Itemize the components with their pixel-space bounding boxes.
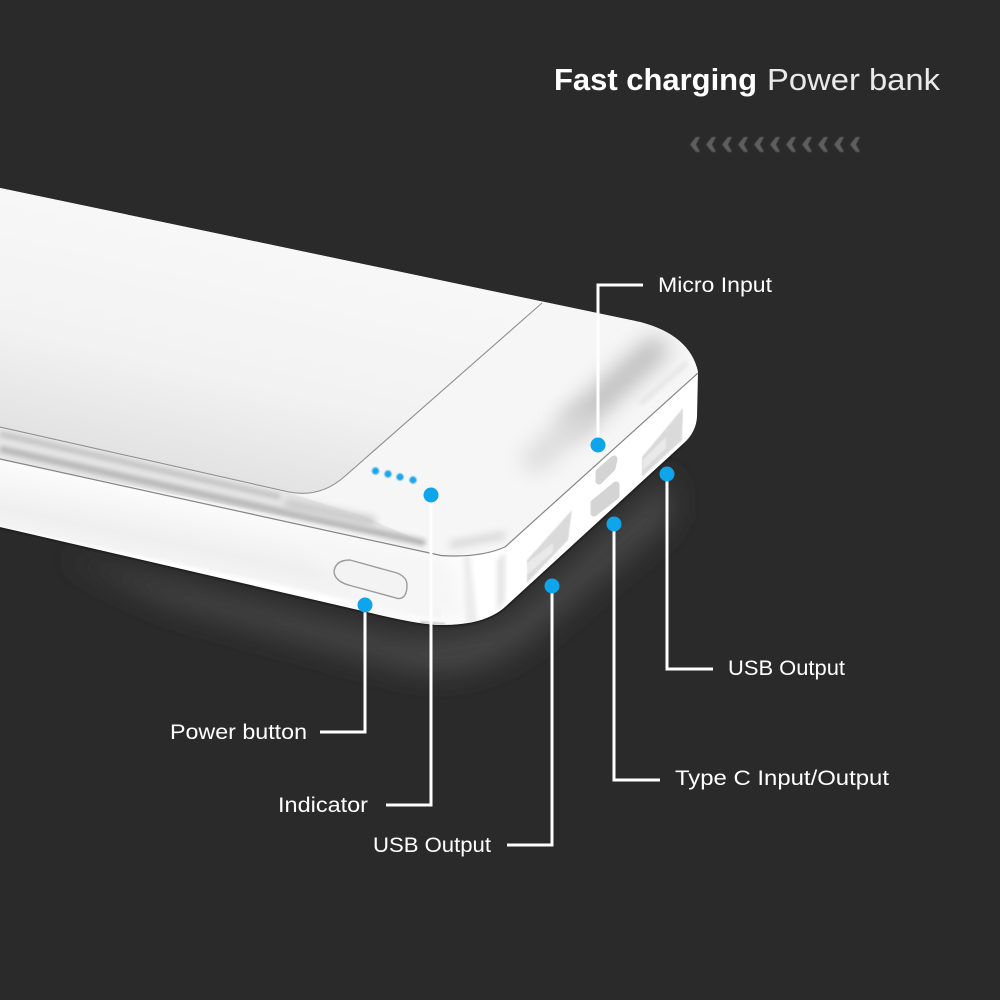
power bank illustration bbox=[0, 188, 698, 628]
callout: Power button: Power button bbox=[170, 721, 307, 744]
title bbox=[554, 62, 941, 97]
title: Fast charging bbox=[554, 62, 757, 97]
power button bbox=[334, 560, 407, 599]
callout: Power button bbox=[170, 598, 372, 744]
callout: USB Output left: USB Output bbox=[373, 834, 491, 857]
top face bbox=[0, 188, 698, 557]
front panel bbox=[0, 188, 542, 493]
port: Type C bbox=[594, 485, 616, 513]
callout: Indicator bbox=[278, 488, 438, 817]
callout: USB Output right bbox=[660, 466, 845, 680]
seam line bbox=[0, 373, 698, 556]
callout: USB Output right: USB Output bbox=[728, 657, 845, 680]
port: USB right bbox=[642, 408, 683, 477]
callout: Type C Input/Output: Type C Input/Output bbox=[675, 767, 889, 790]
callout: Indicator: Indicator bbox=[278, 794, 368, 817]
callout: Micro Input bbox=[590, 274, 772, 452]
callout: Micro Input: Micro Input bbox=[658, 274, 772, 297]
bevel shading bbox=[0, 350, 687, 545]
product reflection glow bbox=[0, 443, 684, 673]
body silhouette bbox=[0, 188, 698, 625]
title: Power bank bbox=[767, 62, 941, 97]
side shading bbox=[0, 478, 506, 625]
LED indicators bbox=[372, 467, 417, 484]
callout: Type C Input/Output bbox=[606, 516, 889, 790]
port: Micro bbox=[599, 459, 614, 481]
port: USB left bbox=[527, 510, 572, 583]
panel edge line bbox=[0, 303, 542, 493]
decorative chevron row bbox=[690, 137, 860, 152]
callout: USB Output left bbox=[373, 578, 560, 857]
